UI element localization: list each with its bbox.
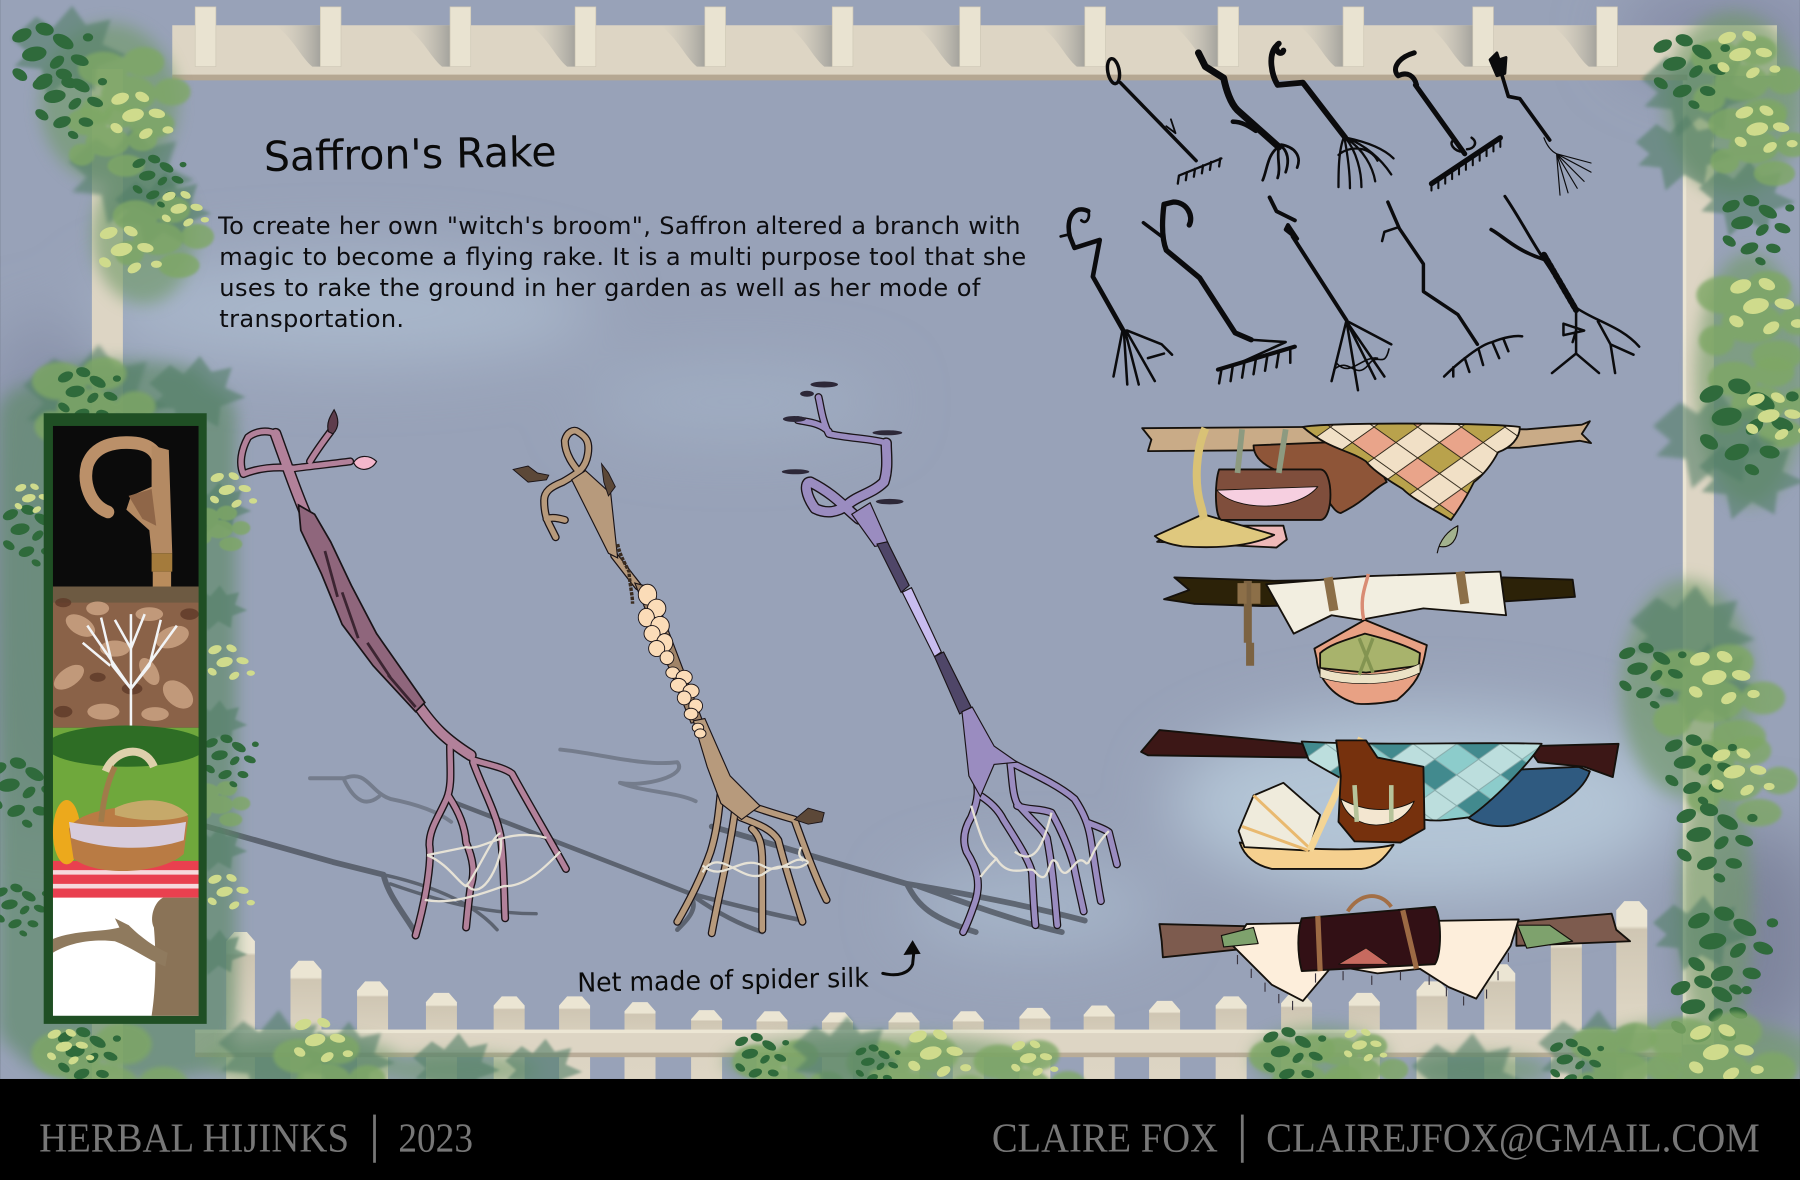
dark roll bag — [1298, 907, 1440, 971]
fence: top rail with pegs — [172, 7, 1777, 80]
basket strap — [1310, 738, 1361, 851]
purple tufts — [782, 382, 903, 504]
sketch 5: leaf-top rake — [1490, 53, 1591, 195]
description text: To create her own "witch's broom", Saffron altered a branch with — [217, 212, 1021, 240]
sketch 9: thin branch — [1382, 202, 1522, 376]
rope — [1197, 428, 1205, 519]
purple rake neck — [852, 503, 889, 546]
picnic basket — [1314, 574, 1427, 704]
bundle 4 — [1159, 896, 1630, 1010]
sketch 6: curled branch — [1061, 209, 1172, 385]
beaded fringe — [1237, 953, 1508, 1010]
footer left text: HERBAL HIJINKS — [39, 1114, 349, 1160]
sketch 1: loop rake — [1106, 58, 1221, 184]
sketch 4: curled rake — [1396, 53, 1500, 191]
white cloth — [1266, 572, 1506, 634]
teal quilt — [1302, 742, 1542, 821]
foliage: around picture panel — [0, 344, 259, 1150]
bag straps — [1318, 910, 1417, 971]
diamond quilt — [1303, 424, 1520, 520]
photo: picnic basket in garden — [46, 725, 207, 900]
photo: leaf litter with white fork — [50, 587, 199, 728]
bag straps — [1237, 429, 1286, 473]
footer right text: CLAIRE FOX — [992, 1114, 1218, 1160]
arrow — [883, 940, 921, 975]
photo: carved cane handle — [53, 426, 199, 588]
sketch 7: rake head branch — [1143, 202, 1295, 383]
cream scales — [638, 584, 706, 738]
sketch 3: fan rake — [1271, 44, 1394, 188]
tan rake — [513, 431, 827, 933]
dark stick — [1164, 577, 1575, 606]
footer right text: CLAIREJFOX@GMAIL.COM — [1266, 1114, 1760, 1160]
foliage: right side — [1549, 11, 1800, 1129]
fence: posts — [92, 69, 1714, 1079]
bundle 2 — [1164, 572, 1575, 704]
caption: net note: Net made of spider silk — [577, 963, 870, 999]
description text: magic to become a flying rake. It is a multi purpose tool that she — [219, 243, 1026, 271]
tan rake handle — [572, 471, 618, 558]
sketch 8: web rake — [1270, 197, 1391, 390]
leather bag — [1336, 740, 1425, 843]
wicker basket — [1239, 783, 1394, 869]
sketch 2: fork rake — [1198, 53, 1299, 180]
description text: uses to rake the ground in her garden as well as her mode of — [219, 274, 981, 302]
pink bud — [328, 410, 338, 434]
brown stick — [1159, 914, 1630, 957]
pink rake handle — [299, 505, 425, 712]
russet cloth — [1254, 441, 1387, 513]
bundle 1 — [1142, 421, 1591, 553]
picture panel — [44, 413, 207, 1024]
pink rake — [241, 410, 566, 936]
cast shadows of the rakes — [207, 750, 1085, 933]
rope dangle — [1248, 581, 1250, 666]
yellow pillow — [1155, 514, 1274, 547]
purple net — [971, 806, 1109, 877]
pink net — [425, 833, 560, 901]
title: Saffron's Rake — [263, 128, 557, 181]
description text — [217, 212, 1026, 333]
blue cloth — [1465, 767, 1590, 826]
tan rake binding — [618, 544, 633, 604]
bag clasps — [1355, 785, 1391, 822]
fence: bottom pickets and rail — [195, 901, 1682, 1079]
tan stick — [1142, 421, 1591, 451]
photo: forked branch on white — [53, 898, 199, 1016]
cream cloth — [1233, 919, 1519, 1001]
rope ties — [1242, 572, 1465, 611]
hanging leaf — [1437, 526, 1458, 553]
pink napkin — [1157, 526, 1287, 548]
footer left text: 2023 — [398, 1114, 473, 1160]
leaf ties — [1221, 925, 1573, 948]
sketch 10: bow branch — [1491, 196, 1639, 373]
silhouette rake sketches — [1061, 44, 1639, 390]
tan rake leaves — [513, 464, 824, 824]
purple rake — [782, 382, 1117, 932]
description text: transportation. — [219, 305, 404, 333]
bundle 3 — [1141, 730, 1619, 869]
tan net — [703, 847, 808, 876]
pink flower — [354, 456, 377, 469]
roll bag — [1216, 469, 1330, 520]
footer right text — [992, 1114, 1760, 1160]
footer bar — [0, 1079, 1800, 1180]
maroon stick — [1141, 730, 1619, 777]
panel frame — [44, 413, 207, 1024]
bag handle — [1348, 896, 1391, 911]
foliage: bottom of fence — [207, 1010, 1654, 1152]
foliage: top left corner — [10, 6, 214, 304]
